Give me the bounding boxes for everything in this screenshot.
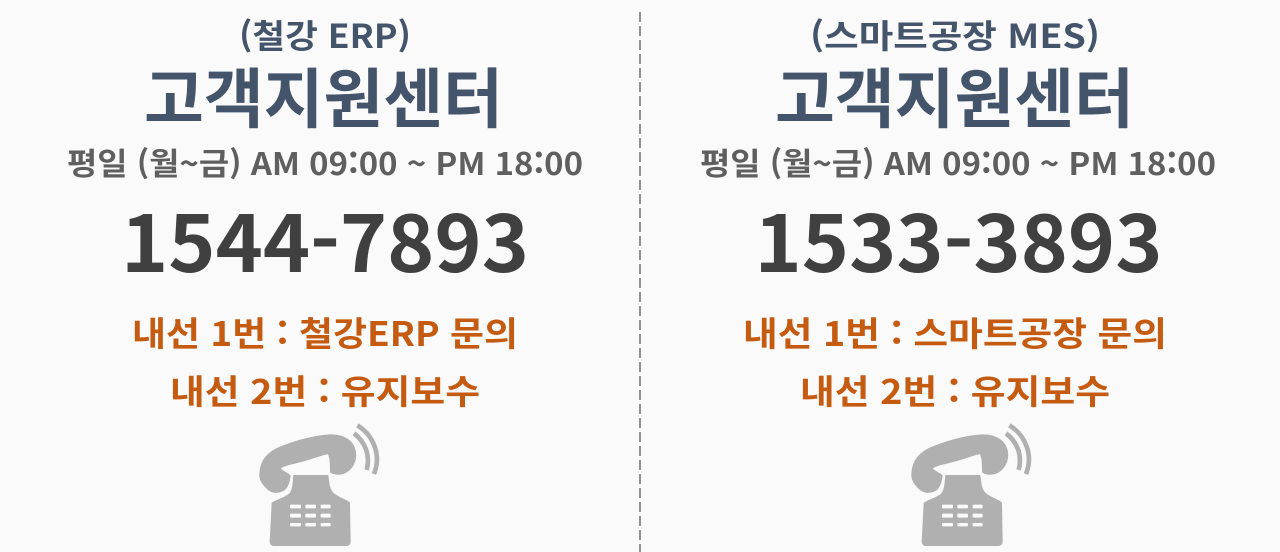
extension 1: 내선 1번 : 스마트공장 문의	[743, 307, 1167, 356]
text: business hours: 평일 (월~금) AM 09:00 ~ PM 18:00	[700, 139, 1216, 184]
panel: smart factory MES support center	[700, 10, 1216, 546]
extension 2: 내선 2번 : 유지보수	[170, 365, 480, 414]
icon: ringing telephone	[260, 425, 377, 546]
subtitle: steel ERP: (철강 ERP)	[239, 10, 411, 58]
phone number: 1533-3893	[754, 183, 1162, 295]
text: business hours: 평일 (월~금) AM 09:00 ~ PM 18:00	[67, 139, 583, 184]
icon: ringing telephone	[912, 425, 1029, 546]
heading: customer support center: 고객지원센터	[144, 47, 503, 141]
extension 1: 내선 1번 : 철강ERP 문의	[132, 307, 518, 356]
panel: steel ERP support center	[67, 10, 583, 546]
extension 2: 내선 2번 : 유지보수	[800, 365, 1110, 414]
subtitle: smart factory MES: (스마트공장 MES)	[810, 10, 1100, 58]
phone number: 1544-7893	[121, 183, 529, 295]
heading: customer support center: 고객지원센터	[775, 47, 1134, 141]
